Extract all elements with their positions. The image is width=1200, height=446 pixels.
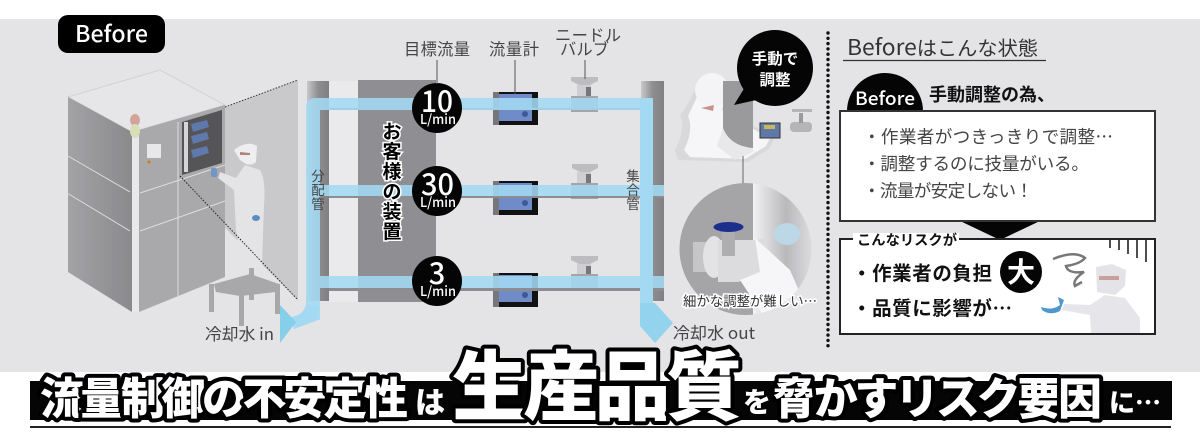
flow meter bodies: [493, 92, 538, 307]
worried worker: [1041, 254, 1140, 333]
label: distribution manifold: 配: [311, 183, 325, 198]
badge: Before: [58, 15, 165, 53]
box: current state list: ・流量が安定しない！: [863, 178, 1033, 203]
label: needle valve: バルブ: [560, 36, 609, 60]
label: customer equipment: の: [382, 182, 402, 203]
cooling water pipes: [306, 98, 664, 326]
grey background panel: [0, 19, 1200, 372]
operator adjusting by hand: [675, 73, 812, 184]
label: cooling water out: 冷却水 out: [673, 320, 755, 344]
headline: particle wa: は: [415, 378, 445, 422]
target flow circle 10: [412, 79, 462, 133]
callout: manual adjustment: 調整: [759, 68, 791, 90]
hatch decoration: [1110, 240, 1146, 262]
label: collection manifold: [626, 169, 640, 212]
label: customer equipment: 客: [382, 141, 402, 163]
risk line: quality: ・品質に影響が…: [852, 292, 1012, 321]
label: customer equipment: 置: [382, 222, 402, 243]
manifold pipe: distribution: [307, 81, 329, 301]
label: customer equipment: 装: [382, 201, 402, 223]
machine cabinet: [67, 70, 225, 312]
target flow circle 10: 10: [421, 79, 453, 121]
manifold pipe: collection: [641, 81, 664, 301]
arrow: cooling water out: [640, 303, 673, 343]
stool: [209, 268, 280, 326]
circular detail: needle valve: [679, 183, 813, 320]
target flow circle 30: L/min: [420, 191, 456, 211]
headline: production quality: 生産品質: [452, 326, 742, 436]
target flow circle 30: 30: [421, 162, 454, 204]
label: collection manifold: 集: [626, 169, 640, 184]
dotted vertical divider: [826, 33, 830, 350]
headline banner: [30, 326, 1172, 436]
label: customer equipment: お: [382, 121, 402, 143]
customer equipment block: [329, 80, 436, 302]
label: target flow: [404, 36, 470, 84]
headline: closing particle: に…: [1109, 383, 1161, 420]
risk line: workload: ・作業者の負担: [852, 257, 992, 286]
target flow circle 3: [412, 251, 462, 306]
box: risks: [840, 229, 1155, 334]
box: current state list: [840, 111, 1155, 221]
icon: large circle: 大: [1007, 251, 1035, 291]
target flow circle 3: L/min: [420, 280, 456, 300]
risks label: こんなリスクが: [857, 229, 957, 250]
connector triangle: [958, 220, 1042, 240]
label: customer equipment: 様: [382, 161, 402, 183]
machine window with flow meters: [182, 110, 222, 175]
label: customer equipment: [382, 121, 402, 243]
target flow circle 3: 3: [429, 251, 445, 293]
label: target flow: 目標流量: [404, 36, 470, 60]
label: flow meter: 流量計: [489, 36, 539, 60]
callout: manual adjustment: [734, 30, 813, 106]
badge dome: Before: [847, 73, 923, 149]
right panel heading: Beforeはこんな状態: [847, 30, 1038, 62]
label: distribution manifold: 管: [311, 197, 325, 212]
label: needle valve: ニードル: [555, 22, 621, 46]
badge dome: Before: Before: [855, 85, 915, 111]
icon: large circle: [1000, 251, 1042, 293]
headline: threatening risk factor: 脅かすリスク要因: [773, 363, 1102, 427]
label: distribution manifold: 分: [311, 169, 325, 184]
label: distribution manifold: [311, 169, 325, 212]
arrow: cooling water in: [280, 305, 318, 343]
caption: fine adjustment is difficult: 細かな調整が難しい…: [683, 290, 817, 310]
zoom panel behind the machine: [225, 80, 298, 300]
subheading: manual adjustment: 手動調整の為、: [929, 81, 1055, 107]
callout: manual adjustment: 手動で: [752, 47, 798, 69]
valves: [571, 77, 598, 290]
dotted zoom line: [180, 176, 298, 300]
label: collection manifold: 合: [626, 183, 640, 198]
target flow circle 30: [412, 162, 462, 216]
box: current state list: ・作業者がつきっきりで調整…: [863, 124, 1113, 149]
headline: flow control instability: 流量制御の不安定性: [40, 363, 408, 427]
label: collection manifold: 管: [626, 197, 640, 212]
box: current state list: ・調整するのに技量がいる。: [863, 151, 1089, 176]
label: flow meter: [489, 36, 539, 94]
badge: Before: Before: [75, 15, 148, 49]
label: cooling water in: 冷却水 in: [205, 321, 274, 345]
worker in cleanroom suit: [211, 144, 264, 285]
target flow circle 10: L/min: [420, 108, 456, 128]
headline: particle wo: を: [743, 381, 771, 421]
label: needle valve: [555, 22, 621, 79]
